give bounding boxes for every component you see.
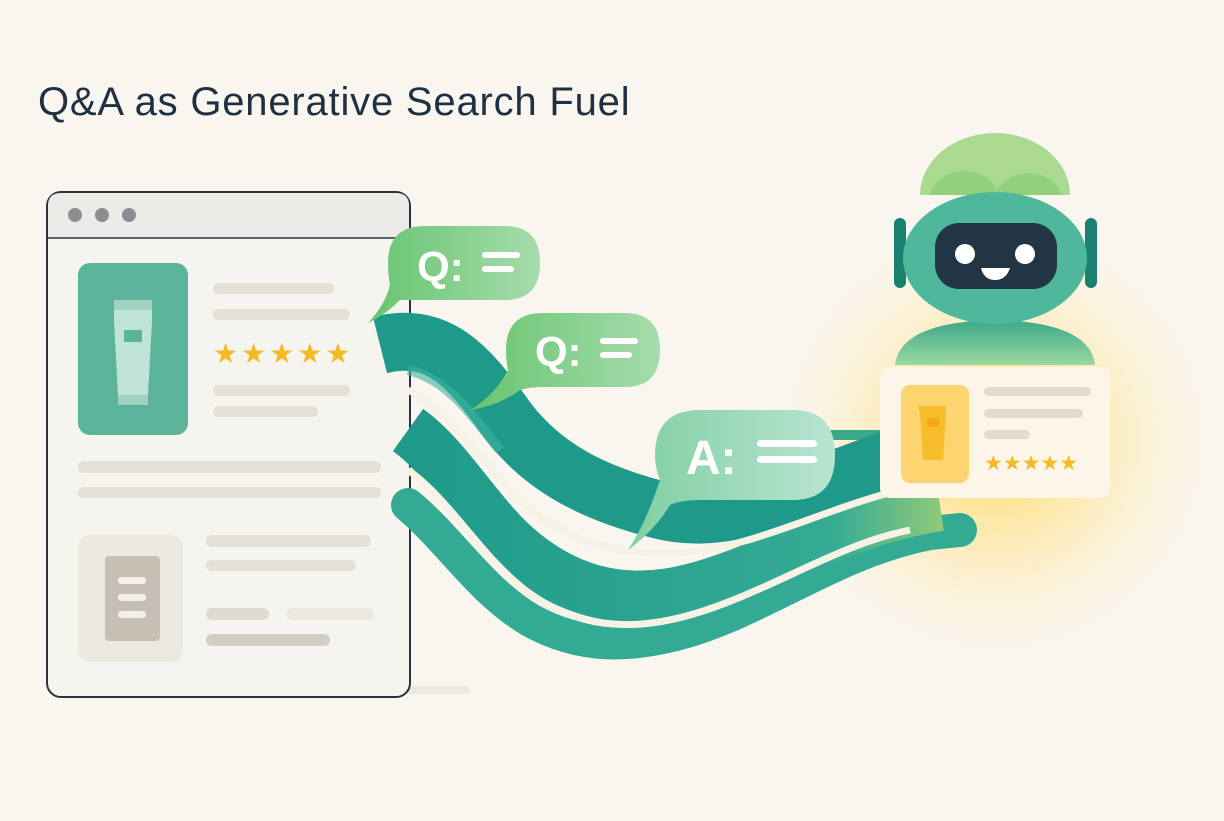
bubble Q2: Q: xyxy=(535,328,582,375)
product card 1 xyxy=(78,263,188,435)
answer card: ★★★★★ xyxy=(984,452,1078,475)
bubble Q1: Q: xyxy=(417,243,464,290)
robot xyxy=(894,133,1097,365)
answer card xyxy=(880,367,1110,498)
bubble A: A: xyxy=(686,432,737,485)
bubble Q1 xyxy=(368,226,540,323)
flowing data waves xyxy=(380,342,960,642)
product card 2 xyxy=(78,535,183,662)
glow behind robot xyxy=(765,200,1224,660)
browser window xyxy=(47,192,470,697)
bubble A xyxy=(628,410,835,550)
stars: ★★★★★ xyxy=(213,338,354,369)
title: Q&A as Generative Search Fuel xyxy=(38,80,630,124)
bubble Q2 xyxy=(470,313,660,410)
